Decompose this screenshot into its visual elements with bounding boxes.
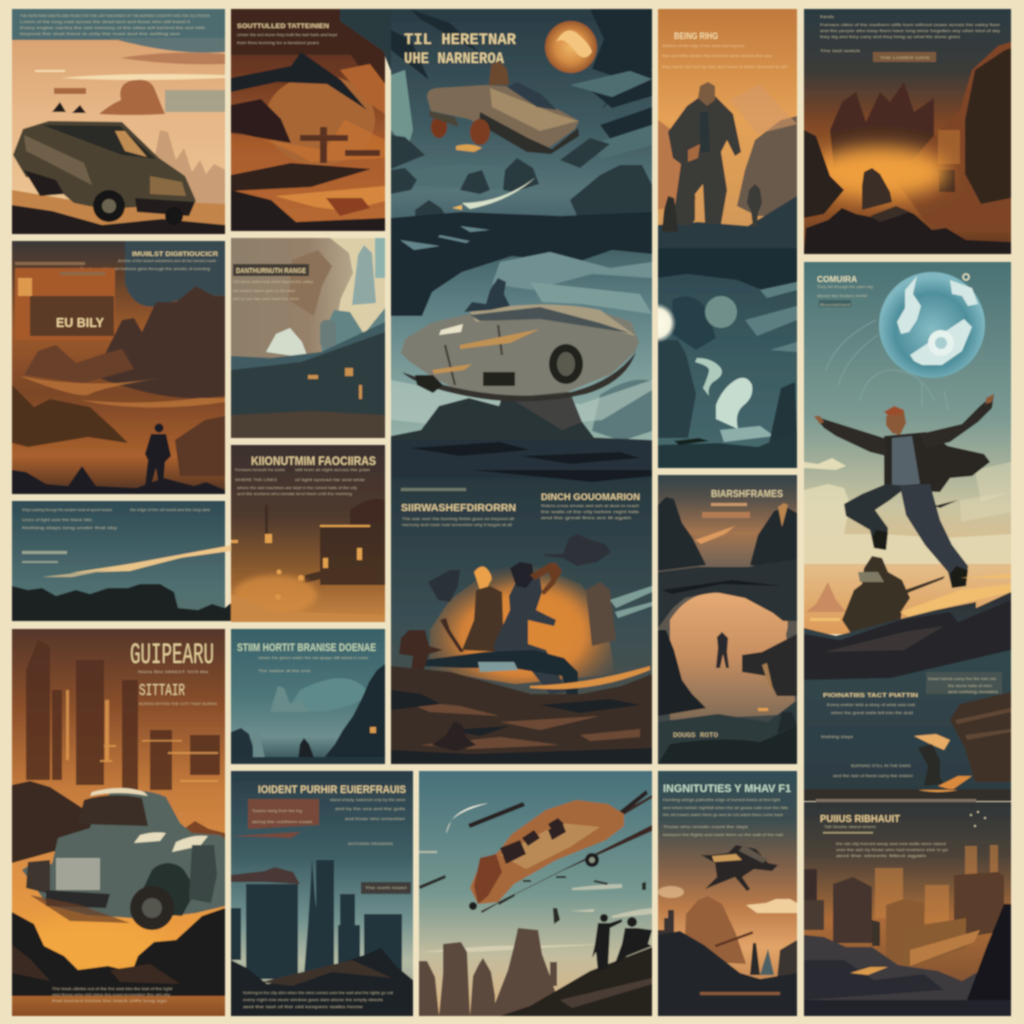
globe — [879, 272, 985, 378]
heading text — [80, 251, 218, 271]
heading: Old stone paths that climb beyond the valley — [233, 279, 313, 284]
bleeding rock — [340, 9, 391, 71]
lights — [308, 368, 362, 399]
panel: orange city and truck — [12, 629, 240, 1016]
bottom text: every night one more window goes dark above the empty streets — [243, 997, 383, 1002]
text lines: and the workers who remain tend them until the morning — [237, 491, 352, 496]
man — [668, 82, 741, 226]
battle fire — [430, 564, 615, 684]
text lines: still burn at night across the plain — [295, 467, 370, 472]
pale swirls — [695, 358, 722, 396]
heading — [702, 489, 783, 518]
text lines: The last watch — [820, 48, 860, 53]
headings: the walls of the city before night falls — [541, 509, 639, 514]
windows — [938, 130, 960, 164]
far peaks — [830, 82, 934, 168]
clouds — [804, 458, 1011, 564]
headings: and the great fires are lit again — [541, 515, 631, 520]
text band: THE HERETNAR WASTELAND ROAD FOR THE LAST MACHINES OF THE BURNED COUNTRY AND THE OLD ROADS — [20, 13, 210, 18]
text lines: over the ash by those who had nowhere else to go — [836, 847, 949, 852]
rocks — [12, 466, 225, 494]
ground — [658, 196, 797, 256]
text lines: the old towers watch them go and do not watch them come back — [663, 812, 783, 817]
dome — [684, 896, 746, 964]
heading text: IMUIILST DIGIITIOUCICR — [132, 251, 218, 258]
cream sky — [330, 238, 385, 338]
arcs — [826, 320, 948, 410]
red box — [231, 799, 319, 838]
right cliffs — [895, 42, 1011, 232]
middle section sky — [391, 240, 652, 445]
headings: DINCH GOUOMARION — [541, 492, 640, 502]
moon — [545, 21, 597, 73]
hall — [265, 499, 385, 585]
mass — [288, 250, 332, 316]
strata — [20, 376, 225, 408]
headings: The war over the burning fields goes on beyond all — [402, 516, 514, 521]
figure — [716, 632, 729, 668]
text lines: Furnaces beneath the works — [235, 467, 285, 472]
heading: above the broken world — [817, 293, 867, 298]
text lines: Hunting wings patrol — [663, 797, 708, 802]
fire — [758, 708, 768, 711]
text boxes: BURNING STILL IN THE DARK — [851, 763, 911, 768]
far peak — [270, 686, 310, 712]
heading: PUIIUS RIBHAUIT — [820, 813, 901, 825]
text lines — [237, 23, 338, 45]
top dark rock — [470, 470, 652, 482]
crouching figure — [432, 721, 476, 751]
text lines: NOTHING REMAINS — [348, 841, 393, 846]
text lines — [330, 797, 411, 894]
hill — [11, 780, 92, 864]
panel: orange text panel — [231, 445, 385, 622]
panel: teal harbor — [231, 629, 385, 764]
swoosh — [462, 177, 536, 209]
ground — [391, 666, 652, 764]
text boxes: Dead hands carry the fire into old — [928, 676, 996, 681]
dark band — [658, 248, 797, 292]
text lines: SOUTTULLED TATTEINIEN — [237, 23, 329, 30]
headings: SIIRWASHEFDIRORRN — [401, 503, 516, 514]
panel: orange canyon city — [804, 9, 1011, 254]
constellation — [970, 811, 986, 827]
flying car — [427, 61, 579, 154]
strata — [231, 120, 385, 162]
tower — [750, 943, 760, 975]
lit windows — [231, 525, 370, 600]
text lines: The north tower — [365, 885, 408, 890]
headings: memory and none now remember why it began at all — [402, 522, 512, 527]
foreground slope — [500, 947, 652, 1016]
panel: sunset truck — [12, 9, 226, 234]
left pillar — [658, 630, 706, 716]
text lines — [22, 507, 210, 563]
hover vehicle — [401, 278, 639, 402]
glow — [812, 146, 948, 198]
warrior — [494, 562, 566, 694]
text lines: THE LOWER GATE — [880, 55, 930, 60]
right city — [319, 664, 385, 764]
heading: STIIM HORTIT BRANISE DOENAE — [237, 642, 376, 654]
text lines: Under the green water the old quays still stand in rows — [258, 655, 368, 660]
panel: standing man and alien trees — [636, 9, 797, 468]
dark top streaks — [391, 9, 652, 141]
heading text: Archive of the desert wanderers and all the burned roads — [118, 258, 216, 263]
text boxes: PIOINATIIIS TACT PIATTIN — [823, 693, 918, 699]
text band: Every engine carries the last memory of the cities left behind the red hills — [20, 25, 205, 30]
heading — [233, 264, 313, 301]
left figure — [399, 618, 464, 672]
bottom text: and the last of the old keepers walks home — [243, 1004, 364, 1009]
dark band — [391, 212, 652, 316]
sky streaks — [35, 38, 225, 112]
text boxes: Nothing stays — [821, 734, 853, 739]
subtitle: BUREN WITHIN THE CITY THAT BURNS — [139, 701, 217, 706]
panel: teal valley — [231, 238, 385, 438]
text lines: The harbor at the end — [258, 668, 310, 673]
glowing orb — [636, 303, 676, 343]
flame — [474, 566, 492, 590]
text lines: and the people who keep them have long since forgotten any other kind of sky — [820, 28, 1000, 33]
heading: They fell through the open sky — [817, 284, 873, 289]
right buildings — [777, 940, 797, 980]
heading: BIARSHFRAMES — [711, 489, 783, 500]
debris — [419, 875, 646, 924]
sand — [231, 595, 385, 622]
text lines — [663, 797, 788, 837]
arch — [658, 559, 797, 628]
ledge — [742, 634, 797, 696]
caption lines — [52, 986, 173, 1003]
buildings — [804, 869, 1004, 970]
heading: the towers stand open to the wind — [233, 288, 295, 293]
text lines — [258, 655, 368, 673]
rubble — [662, 196, 678, 232]
rock stack behind warrior — [462, 586, 504, 652]
text lines: and return before nightfall when the air grows cold over the hills — [663, 805, 788, 810]
brown rock — [950, 692, 1011, 782]
upper rocks — [658, 497, 706, 571]
heading lines: Walkers of the edge of the world and beyond — [662, 43, 744, 48]
text lines: and the streets filled again — [836, 853, 926, 858]
text lines: stand empty, watched only by the wind — [330, 797, 405, 802]
heading lines: the red hills where the burned land meets the sea — [662, 53, 773, 58]
text lines: between the flights and mark them on the wall of the hall — [663, 832, 783, 837]
opening — [266, 328, 308, 358]
title — [404, 31, 516, 68]
floor — [658, 700, 797, 764]
headings — [401, 488, 640, 527]
ground — [231, 757, 385, 764]
foreground — [658, 931, 797, 1016]
heading: IOIDENT PURHIR EUIERFRAUIS — [258, 784, 406, 796]
panel: plane in teal sky — [419, 771, 652, 1016]
upper section sky — [391, 9, 652, 224]
rocks — [12, 584, 235, 622]
caption lines: and those who still drive the road remember the old city — [52, 992, 170, 997]
text boxes: and nothing remains — [948, 689, 998, 694]
text lines: and by the sea and the gulls — [335, 806, 405, 811]
lower section — [391, 478, 652, 764]
left rock — [804, 130, 844, 218]
ground — [11, 190, 226, 226]
cloud swirl — [290, 678, 367, 712]
text lines: Furnace cities of the southern cliffs burn without cease across the valley floor — [820, 22, 1001, 27]
subtitle — [138, 669, 217, 706]
text lines: where the last machines are kept in the ruined halls of the city — [237, 485, 357, 490]
dark corner — [961, 904, 1011, 1016]
panel: orange canyon and lone figure — [12, 241, 225, 494]
text lines — [235, 467, 370, 496]
right tower — [586, 582, 616, 646]
structure — [300, 127, 380, 163]
panel: dark teal towers — [231, 771, 413, 1016]
figure — [862, 168, 892, 210]
title: GUIPEARU — [130, 639, 214, 673]
red box: along the northern coast — [252, 819, 313, 824]
text lines: of light spread far and wide — [295, 477, 366, 482]
heading — [817, 275, 873, 307]
text lines: their fires burning for a hundred years — [237, 40, 319, 45]
teal hills — [320, 308, 385, 368]
streak — [42, 544, 238, 577]
towers — [231, 859, 402, 979]
text boxes: when the great walls fell into the dust — [831, 710, 914, 715]
subtitle: Nora Bio MADIT SOI ilia — [138, 669, 209, 674]
towers — [26, 640, 220, 790]
cave roof — [230, 10, 386, 84]
caption lines: that burned below the black cliffs long ago — [52, 998, 168, 1003]
light patches — [400, 71, 652, 189]
text boxes: the stone halls of men — [948, 683, 992, 688]
caption: DOUGS ROTO — [673, 732, 718, 739]
text lines: Ships passing through the western dusk at speed toward — [22, 507, 112, 512]
broken roof — [231, 867, 300, 884]
text lines: the edge of burned towns at first light — [708, 797, 781, 802]
rock creature — [842, 556, 945, 644]
text lines: Those who remain count the days — [663, 824, 748, 829]
panel: rock arch — [658, 475, 797, 764]
far peak — [806, 582, 846, 612]
heading text: The lines of the old fortress glow through the smoke of evening — [80, 266, 210, 271]
heading: KIIONUTMIM FAOCIIRAS — [251, 454, 376, 468]
heading: INGNITUTIES Y MHAV F1 — [663, 783, 791, 795]
heading lines — [662, 31, 787, 69]
text lines: and those who remember — [345, 816, 406, 821]
text lines: WHERE THE LINES — [235, 477, 277, 482]
clouds — [658, 886, 797, 913]
ground streaks — [400, 700, 640, 749]
plane — [701, 845, 778, 891]
mid rocks — [391, 135, 652, 227]
caption lines: The truck climbs out of the fire and into the last of the light — [52, 986, 173, 991]
panel: central poster — [391, 9, 652, 764]
subtitle: SITTAIR — [139, 682, 185, 701]
skyline background — [804, 802, 1011, 1016]
text lines: Under the red stone they built the last halls and kept — [237, 32, 338, 37]
flame — [914, 734, 950, 750]
figure — [145, 424, 171, 486]
distant spires — [154, 130, 226, 204]
flyer — [543, 534, 611, 566]
rocks — [804, 935, 1001, 1016]
red box: Towers rising from the fog — [252, 808, 302, 813]
text lines: the edge of the old world and the long dark — [130, 507, 210, 512]
text lines: Tall blocks stand where — [824, 824, 877, 829]
tower and ground — [767, 382, 797, 452]
glow — [233, 575, 317, 615]
right debris — [185, 820, 226, 840]
text lines: Nob — [820, 14, 835, 19]
heading: COMUIRA — [817, 275, 857, 284]
text band — [12, 9, 225, 40]
cloud — [54, 80, 165, 115]
left city — [231, 728, 275, 764]
sun streaks — [810, 574, 1011, 621]
truck — [22, 788, 240, 930]
foreground rocks — [12, 908, 225, 996]
figures — [592, 914, 652, 972]
title: TIL HERETNAR — [404, 31, 516, 49]
dark band — [231, 52, 367, 110]
heading: and no one has come back from there — [233, 296, 300, 301]
plane — [468, 790, 652, 913]
top right teal — [125, 241, 225, 306]
dust — [30, 895, 130, 923]
fortress — [15, 262, 115, 340]
fire — [47, 922, 146, 971]
panel: orange plane — [658, 771, 797, 1016]
arch opening — [670, 593, 797, 720]
bottom text — [243, 990, 394, 1009]
text band: beyond the dust there is only the road and the setting sun — [20, 31, 180, 36]
rocks — [231, 948, 413, 1016]
rocks — [804, 208, 1011, 254]
crescent — [446, 803, 489, 834]
text lines — [820, 14, 1001, 62]
big crag — [85, 286, 225, 398]
text lines: the old city burned away and new walls were raised — [836, 841, 946, 846]
man — [814, 394, 994, 588]
text lines: they dig and they carry and they bring up what the stone gives — [820, 34, 960, 39]
lit strip — [275, 186, 385, 211]
right sky streaks — [610, 586, 652, 618]
crouching figure — [918, 744, 944, 786]
truck — [13, 102, 196, 225]
second circle — [705, 296, 737, 328]
text lines: Lines of light over the black hills — [22, 517, 92, 522]
streaks — [745, 282, 797, 352]
text lines — [823, 824, 949, 858]
tree trunk — [658, 340, 696, 438]
reflection — [456, 144, 482, 152]
label: EU BILY — [56, 315, 104, 330]
figure — [298, 738, 315, 760]
text boxes: Every ember tells a story of what was lost — [827, 702, 916, 707]
heading: Burnished — [820, 302, 850, 307]
small fighter — [428, 570, 460, 602]
text lines: Nothing stays long under that sky — [22, 525, 117, 530]
panel: jumping man, globe and city skyline — [804, 262, 1011, 1016]
center glow — [268, 77, 376, 154]
panel: orange cave — [231, 9, 391, 231]
text boxes: and the last of them carry the ember — [833, 773, 914, 778]
tower lights — [66, 690, 218, 782]
mountains — [12, 385, 128, 447]
dark slope — [804, 592, 1011, 792]
right edge — [375, 238, 385, 278]
pale patches — [492, 252, 652, 290]
heading lines: BEING RIHG — [674, 31, 718, 41]
spire — [352, 245, 376, 305]
text band: Lorem of the long road across the dead land and those who still travel it — [20, 19, 191, 24]
far buildings — [875, 845, 998, 925]
lower band — [804, 789, 1011, 801]
title: UHE NARNEROA — [404, 50, 504, 68]
rock pedestal — [391, 394, 651, 454]
spires — [419, 928, 558, 1016]
slope — [231, 322, 385, 438]
headings: Riders cross smoke and ash at dusk to reach — [541, 503, 639, 508]
left stacks — [658, 910, 674, 940]
pale shaft — [391, 70, 413, 150]
panel: teal streak — [12, 501, 238, 622]
heading lines: they went out one by one and none of them returned to tell — [662, 64, 787, 69]
dark foot — [231, 190, 385, 231]
streaks — [400, 226, 490, 250]
heading: DANTHURNUTH RANGE — [236, 268, 306, 275]
small figure — [747, 184, 762, 227]
hill right — [592, 380, 652, 441]
vehicle under warrior — [422, 650, 578, 700]
text boxes — [821, 672, 1002, 778]
bottom dark strip — [391, 440, 652, 480]
bottom text: Nothing in the city stirs when the wind comes over the wall and the lights go out — [243, 990, 394, 995]
far mountains — [658, 120, 696, 210]
streak — [695, 526, 735, 544]
clouds — [419, 851, 652, 952]
